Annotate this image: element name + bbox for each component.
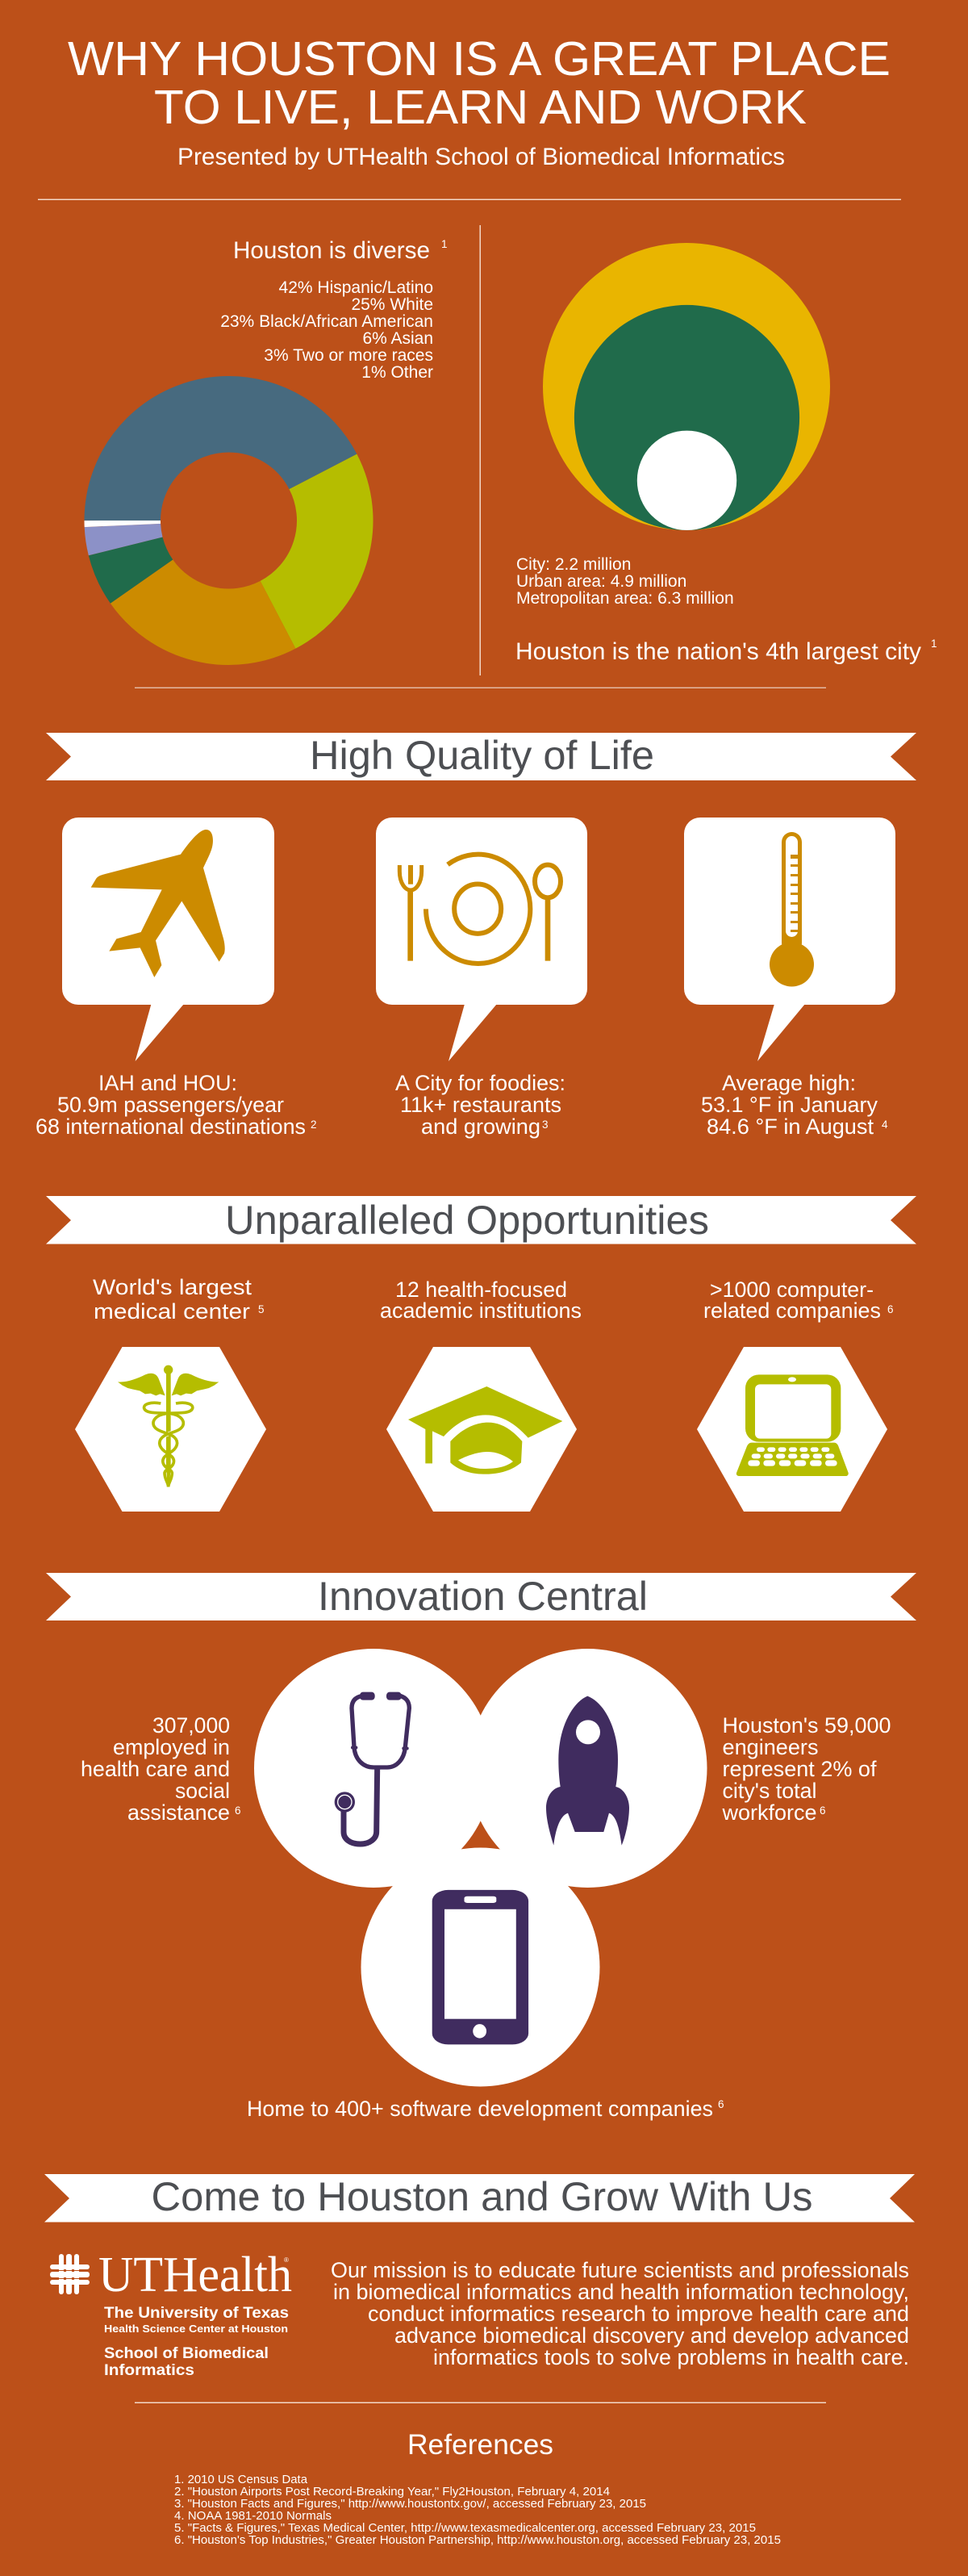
banner: Innovation Central: Innovation Central (318, 1573, 648, 1619)
heading: Houston is diverse: 1 (441, 238, 448, 250)
mission statement: advance biomedical discovery and develop advanced (394, 2323, 909, 2348)
references heading: References (407, 2428, 553, 2461)
icon: plate and cutlery (399, 855, 561, 964)
icon: caduceus (118, 1365, 219, 1487)
medical center text: medical center (94, 1299, 250, 1324)
medical center text (93, 1275, 265, 1324)
panel: airports (35, 818, 317, 1139)
airport text: IAH and HOU: (98, 1071, 237, 1095)
icon: smartphone (432, 1890, 528, 2044)
weather text: 53.1 °F in January (701, 1093, 878, 1117)
speech bubble (376, 818, 587, 1061)
mission statement: in biomedical informatics and health information technology, (333, 2280, 909, 2304)
panel: city size (515, 243, 937, 665)
mission statement: Our mission is to educate future scientists and professionals (331, 2258, 909, 2282)
computer companies text (703, 1278, 894, 1323)
academic text: 12 health-focused (395, 1278, 567, 1302)
panel: weather (684, 818, 895, 1139)
banner: High Quality of Life: High Quality of Life (310, 732, 654, 778)
panel: foodies (376, 818, 587, 1139)
logo: UTHealth: The University of Texas (104, 2305, 289, 2322)
hexagon (697, 1347, 887, 1512)
heading: Houston is diverse: Houston is diverse (233, 237, 430, 264)
banner: High Quality of Life (46, 732, 916, 780)
mission statement (331, 2258, 909, 2369)
icon: stethoscope (335, 1692, 409, 1844)
logo: UTHealth: School of Biomedical (104, 2345, 269, 2362)
diversity legend list: 42% Hispanic/Latino (279, 278, 433, 297)
references list: 2. "Houston Airports Post Record-Breaking Year," Fly2Houston, February 4, 2014 (174, 2485, 610, 2499)
computer companies text: related companies (703, 1298, 881, 1323)
icon: laptop (736, 1374, 849, 1476)
foodies text: 3 (542, 1119, 549, 1131)
banner: Unparalleled Opportunities (46, 1196, 916, 1244)
logo: UTHealth (50, 2248, 292, 2379)
references list: 3. "Houston Facts and Figures," http://www.houstontx.gov/, accessed February 23, 2015 (174, 2497, 646, 2511)
mission statement: conduct informatics research to improve health care and (368, 2302, 909, 2326)
foodies text (395, 1071, 565, 1139)
airport text: 2 (311, 1119, 317, 1131)
references list: 4. NOAA 1981-2010 Normals (174, 2509, 332, 2523)
diversity legend list: 25% White (351, 295, 433, 314)
icon: rocket (546, 1696, 629, 1846)
banner: Innovation Central (46, 1573, 916, 1620)
logo: UTHealth: ® (284, 2256, 289, 2264)
health care employment text: health care and (81, 1757, 230, 1781)
icon: airplane (91, 830, 225, 977)
donut chart: demographics (81, 373, 377, 668)
references list: 1. 2010 US Census Data (174, 2473, 308, 2486)
population figures: Urban area: 4.9 million (516, 572, 686, 591)
icon: thermometer (770, 832, 814, 986)
health care employment text (81, 1713, 241, 1825)
weather text: 4 (882, 1119, 888, 1131)
panel: medical center (75, 1275, 266, 1512)
logo mark: woven cross (50, 2254, 90, 2294)
nested circles: population (543, 243, 830, 530)
logo: UTHealth: UTHealth (98, 2248, 292, 2302)
diversity legend list (220, 278, 433, 382)
academic text (380, 1278, 582, 1323)
health care employment text: 6 (235, 1804, 241, 1817)
diversity legend list: 6% Asian (362, 329, 433, 348)
computer companies text: 6 (887, 1303, 894, 1315)
title (68, 31, 891, 134)
foodies text: 11k+ restaurants (400, 1093, 561, 1117)
engineers text: engineers (723, 1735, 818, 1759)
medical center text: World's largest (93, 1275, 252, 1299)
diversity legend list: 1% Other (361, 363, 433, 382)
logo: UTHealth: Informatics (104, 2362, 194, 2379)
academic text: academic institutions (380, 1298, 582, 1323)
title: WHY HOUSTON IS A GREAT PLACE (68, 31, 891, 86)
population figures: Metropolitan area: 6.3 million (516, 589, 734, 608)
subtitle: Presented by UTHealth School of Biomedical Informatics (177, 144, 785, 170)
software companies text: 6 (718, 2098, 724, 2110)
diversity legend list: 23% Black/African American (220, 312, 433, 331)
population figures (516, 555, 734, 608)
heading: 4th largest city: Houston is the nation's 4th largest city (515, 638, 921, 665)
references list: 6. "Houston's Top Industries," Greater Houston Partnership, http://www.houston.org, accessed February 23, 2015 (174, 2533, 781, 2547)
speech bubble (684, 818, 895, 1061)
mission statement: informatics tools to solve problems in health care. (433, 2345, 909, 2369)
engineers text: represent 2% of (723, 1757, 877, 1781)
health care employment text: employed in (113, 1735, 230, 1759)
icon: graduation cap (408, 1386, 562, 1474)
venn circles (254, 1649, 707, 2087)
speech bubble (62, 818, 274, 1061)
panel: computer companies (697, 1278, 894, 1512)
weather text: Average high: (722, 1071, 856, 1095)
health care employment text: social (175, 1779, 230, 1803)
references list (174, 2473, 781, 2547)
references list: 5. "Facts & Figures," Texas Medical Center, http://www.texasmedicalcenter.org, accessed February 23, 2015 (174, 2521, 756, 2535)
hexagon (386, 1347, 577, 1512)
panel: diversity (81, 237, 448, 668)
engineers text: 6 (820, 1804, 826, 1817)
panel: academic institutions (380, 1278, 582, 1512)
weather text (701, 1071, 888, 1139)
computer companies text: >1000 computer- (710, 1278, 874, 1302)
engineers text: city's total (723, 1779, 816, 1803)
title: TO LIVE, LEARN AND WORK (154, 80, 807, 134)
hexagon (75, 1347, 266, 1512)
logo: UTHealth: Health Science Center at Houston (104, 2323, 288, 2335)
health care employment text: assistance (127, 1800, 230, 1825)
medical center text: 5 (258, 1303, 265, 1315)
engineers text (722, 1713, 891, 1825)
population figures: City: 2.2 million (516, 555, 631, 574)
banner: Unparalleled Opportunities: Unparalleled Opportunities (225, 1197, 709, 1243)
banner: Come to Houston and Grow With Us: Come to Houston and Grow With Us (152, 2173, 813, 2219)
engineers text: workforce (722, 1800, 816, 1825)
airport text (35, 1071, 317, 1139)
foodies text: A City for foodies: (395, 1071, 565, 1095)
diversity legend list: 3% Two or more races (264, 346, 433, 365)
foodies text: and growing (421, 1114, 540, 1139)
heading: 4th largest city: 1 (931, 638, 937, 650)
health care employment text: 307,000 (152, 1713, 230, 1738)
airport text: 50.9m passengers/year (57, 1093, 284, 1117)
airport text: 68 international destinations (35, 1114, 306, 1139)
software companies text: Home to 400+ software development companies (247, 2097, 713, 2121)
engineers text: Houston's 59,000 (723, 1713, 891, 1738)
weather text: 84.6 °F in August (707, 1114, 874, 1139)
